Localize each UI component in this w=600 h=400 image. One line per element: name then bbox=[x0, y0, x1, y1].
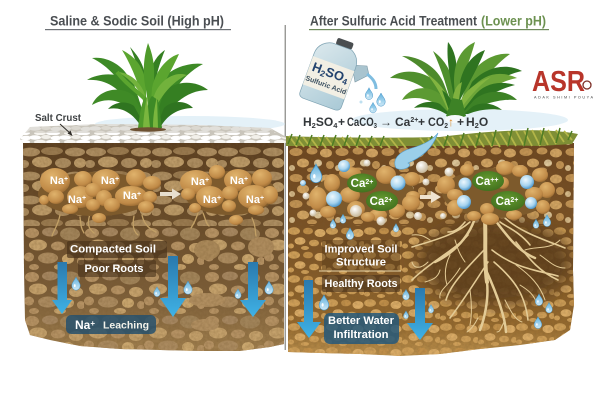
label: better water infiltration: Better Water bbox=[328, 315, 395, 327]
arrow: leaching flow 1 bbox=[52, 262, 72, 314]
bottle body: Sulfuric Acid bbox=[304, 75, 347, 96]
sodium ion labels: + bbox=[260, 195, 264, 202]
label: healthy roots bbox=[322, 275, 400, 292]
bottle body: 2 bbox=[319, 68, 327, 79]
arrow: soil change bbox=[160, 188, 181, 200]
sodium ion labels: Na bbox=[123, 190, 137, 202]
heading: after sulfuric acid treatment bbox=[309, 14, 549, 30]
bottle body: 4 bbox=[341, 76, 349, 87]
label: improved soil structure: Improved Soil bbox=[324, 244, 398, 256]
green calcium ions: Ca bbox=[370, 196, 384, 208]
label: sodium leaching: Leaching bbox=[103, 320, 149, 332]
chemical equation: CO bbox=[428, 115, 446, 129]
chemical equation: 2 bbox=[475, 121, 479, 130]
label: compacted soil: Compacted Soil bbox=[70, 244, 156, 256]
chemical equation: → bbox=[380, 115, 392, 129]
sodium ion labels: Na bbox=[246, 194, 260, 206]
chemical equation: 2 bbox=[312, 121, 316, 130]
green calcium ions: Ca bbox=[476, 176, 490, 188]
sky haze bbox=[95, 116, 285, 132]
label: salt crust: Salt Crust bbox=[35, 113, 82, 124]
chemical equation: + bbox=[418, 115, 425, 129]
chemical equation: H bbox=[466, 115, 475, 129]
sodium ion labels: Na bbox=[50, 175, 64, 187]
chemical equation: 3 bbox=[374, 121, 377, 130]
bottle body bbox=[298, 32, 363, 112]
chemical equation: + bbox=[457, 115, 464, 129]
sodium ion labels: + bbox=[115, 176, 119, 183]
arrow: soil change bbox=[420, 191, 441, 203]
label: poor roots: Poor Roots bbox=[84, 263, 144, 275]
sodium ion labels: Na bbox=[68, 194, 82, 206]
chemical equation: 2 bbox=[444, 121, 448, 130]
chemical equation: ↑ bbox=[448, 115, 454, 129]
label: improved soil structure: Structure bbox=[336, 256, 386, 268]
chemical equation: CaCO bbox=[347, 115, 380, 129]
label: poor roots bbox=[78, 260, 156, 277]
arrow: water infiltration 2 bbox=[407, 288, 433, 340]
logo: ASR: ASR bbox=[532, 66, 585, 98]
water spheres and pearls bbox=[300, 160, 537, 226]
chemical equation: + bbox=[338, 115, 345, 129]
spout bbox=[352, 65, 369, 82]
sodium aggregated clods bbox=[38, 165, 278, 225]
green calcium ions: 2+ bbox=[510, 197, 518, 204]
bottle body: SO bbox=[324, 64, 346, 84]
chemical equation: Ca bbox=[395, 115, 410, 129]
chemical equation: SO bbox=[316, 115, 333, 129]
label: better water infiltration bbox=[324, 313, 399, 344]
water drops bbox=[72, 277, 273, 299]
label: compacted soil bbox=[67, 241, 167, 258]
compacted soil cross-section bbox=[20, 142, 288, 357]
label: better water infiltration: Infiltration bbox=[334, 329, 389, 341]
sodium ion labels: + bbox=[137, 191, 141, 198]
grass layer bbox=[286, 128, 578, 148]
divider between panels bbox=[285, 25, 286, 350]
salt crust layer bbox=[20, 124, 290, 144]
arrow: leaching flow 2 bbox=[160, 256, 186, 317]
label: salt crust bbox=[35, 113, 82, 136]
label: sodium leaching bbox=[66, 315, 156, 334]
sodium ion labels: + bbox=[82, 195, 86, 202]
label: improved soil structure bbox=[319, 240, 401, 272]
chemical equation: 4 bbox=[333, 121, 338, 130]
logo: ASR: ADAK SHIMI POUYA bbox=[534, 96, 593, 100]
sodium ion labels: + bbox=[64, 176, 68, 183]
sodium ion labels bbox=[50, 175, 264, 206]
chemical equation: O bbox=[479, 115, 488, 129]
sodium ion labels: + bbox=[244, 176, 248, 183]
label: sodium leaching: + bbox=[90, 319, 95, 328]
sodium ion labels: Na bbox=[203, 194, 217, 206]
chemical equation bbox=[303, 115, 488, 130]
water drops bbox=[310, 164, 552, 329]
chemical equation: 2+ bbox=[410, 117, 418, 124]
sodium ion labels: + bbox=[217, 195, 221, 202]
plant: sparse bbox=[87, 43, 208, 132]
improved soil cross-section bbox=[286, 142, 578, 358]
arrow: leaching flow 3 bbox=[240, 262, 266, 317]
green calcium ions: Ca bbox=[496, 196, 510, 208]
heading: saline and sodic soil: Saline & Sodic Soil (High pH) bbox=[50, 14, 224, 28]
bottle of sulfuric acid bbox=[298, 32, 385, 113]
pouring acid bbox=[367, 74, 376, 89]
green calcium ions: 2+ bbox=[365, 179, 373, 186]
heading: after sulfuric acid treatment: After Sulfuric Acid Treatment bbox=[310, 14, 477, 28]
chemical equation: H bbox=[303, 115, 312, 129]
sky haze bbox=[352, 109, 568, 131]
sodium ion labels: Na bbox=[230, 175, 244, 187]
green calcium ions: 2+ bbox=[384, 197, 392, 204]
green calcium ions: Ca bbox=[351, 178, 365, 190]
plant roots, poor bbox=[52, 213, 256, 236]
roots, healthy bbox=[412, 218, 565, 332]
arrow: water infiltration 1 bbox=[297, 280, 321, 338]
green calcium ions bbox=[347, 171, 525, 211]
panel: after sulfuric acid treatment bbox=[286, 32, 593, 358]
sodium ion labels: Na bbox=[101, 175, 115, 187]
sodium ion labels: + bbox=[205, 177, 209, 184]
bottle body: H bbox=[310, 59, 324, 76]
label: sodium leaching: Na bbox=[75, 318, 90, 332]
label: healthy roots: Healthy Roots bbox=[324, 278, 398, 290]
calcium aggregated clods bbox=[309, 161, 555, 225]
plant: healthy bbox=[390, 42, 522, 123]
acid splash into soil bbox=[395, 133, 438, 169]
panel: saline and sodic soil bbox=[20, 43, 290, 357]
heading: after sulfuric acid treatment: (Lower pH) bbox=[481, 14, 546, 28]
green calcium ions: ++ bbox=[490, 177, 498, 184]
sodium ion labels: Na bbox=[191, 176, 205, 188]
